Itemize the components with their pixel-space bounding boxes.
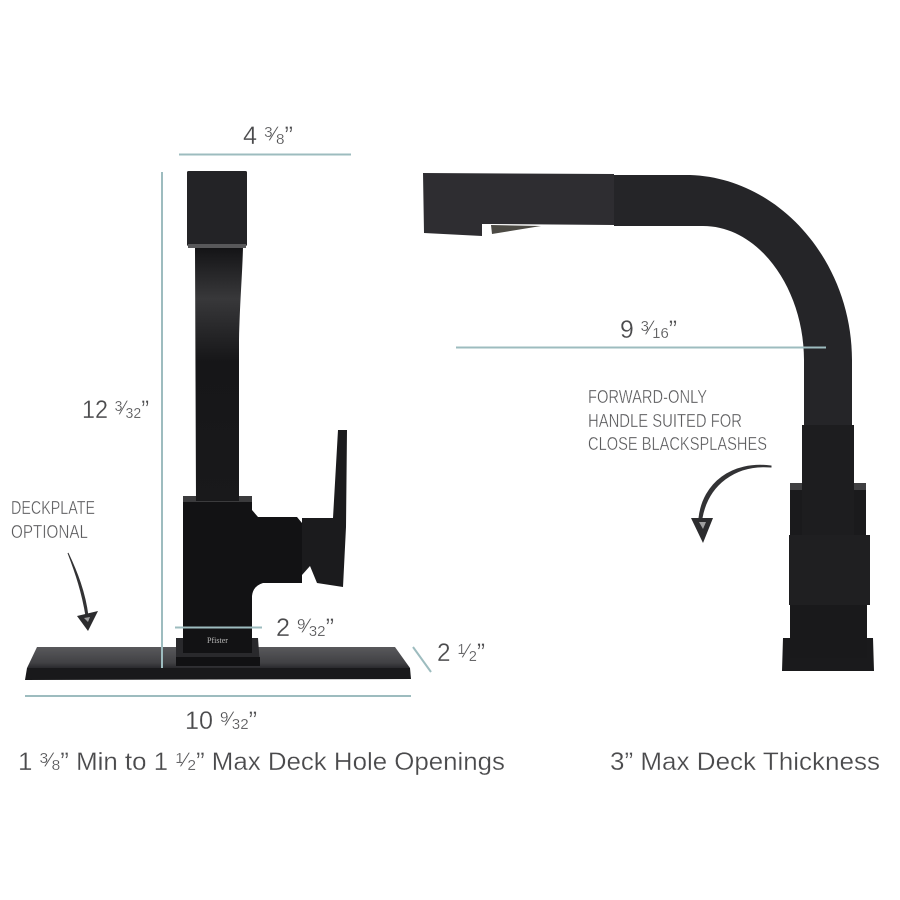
- faucet: front view: [423, 173, 874, 671]
- caption: deck hole openings: 3: [40, 750, 48, 767]
- dimension: spout width: ”: [285, 122, 293, 150]
- dimension: height: ⁄: [118, 398, 128, 420]
- handle: [302, 430, 347, 587]
- dimension: base width: 2: [276, 614, 290, 642]
- dimension: height: 12: [82, 396, 110, 424]
- handle tabs: [790, 483, 866, 535]
- dimension: reach: 16: [652, 325, 669, 342]
- base escutcheon: [176, 638, 260, 666]
- note: forward-only handle: CLOSE BLACKSPLASHES: [588, 433, 767, 454]
- note: deckplate optional: [11, 497, 95, 542]
- dimension: reach: 9: [620, 316, 634, 344]
- faucet body and handle connector: [183, 496, 302, 653]
- note: deckplate optional: OPTIONAL: [11, 521, 88, 542]
- dimension: reach: ⁄: [644, 318, 655, 340]
- caption: deck hole openings: ⁄: [179, 750, 190, 772]
- spray head lower tab: [491, 225, 541, 234]
- dimension: spout width: 8: [276, 131, 285, 148]
- dimension lines: [25, 154, 826, 696]
- arrow: to handle: [691, 465, 771, 543]
- dimension: height: 3: [115, 398, 122, 415]
- note: forward-only handle: [588, 386, 767, 454]
- dimension: reach: 3: [641, 318, 649, 335]
- caption: deck hole openings: ” Min to 1: [60, 748, 164, 776]
- pull-out spray head: [423, 173, 614, 236]
- dimension: deckplate depth: ”: [477, 639, 485, 667]
- dimension: deckplate width: ”: [249, 707, 257, 735]
- dimension: base width: ⁄: [300, 616, 311, 638]
- spray head: [187, 171, 247, 248]
- note: forward-only handle: HANDLE SUITED FOR: [588, 410, 742, 431]
- caption: deck hole openings: 8: [52, 757, 60, 774]
- dimension: deckplate width: 10: [185, 707, 213, 735]
- caption: deck hole openings: ⁄: [43, 750, 54, 772]
- caption: deck hole openings: 1: [175, 750, 184, 767]
- spout arc: [614, 175, 852, 426]
- dimension: spout width: 4: [243, 122, 257, 150]
- caption: deck hole openings: ” Max Deck Hole Openings: [196, 748, 495, 776]
- dimension: deckplate depth: ⁄: [461, 640, 471, 662]
- dimension: base width: ”: [326, 614, 334, 642]
- note: deckplate optional: DECKPLATE: [11, 497, 95, 518]
- body top plate: [183, 496, 252, 502]
- arrow: to deckplate: [68, 553, 98, 631]
- caption: deck thickness: 3” Max Deck Thickness: [610, 748, 880, 776]
- lower body: [790, 605, 867, 658]
- dimension: deckplate depth: 2: [469, 648, 477, 665]
- caption: deck hole openings: 1: [18, 748, 32, 776]
- handle column: [802, 425, 854, 535]
- dimension: spout width: 3: [264, 124, 273, 141]
- dimension: deckplate width: 9: [220, 709, 228, 726]
- dimension: deckplate depth: 2: [437, 639, 451, 667]
- dimension: base width: 9: [297, 616, 305, 633]
- caption: deck hole openings: 2: [187, 757, 196, 774]
- dimension: reach: ”: [669, 316, 677, 344]
- faucet: side view with deckplate: [25, 171, 411, 680]
- dimension: height: 32: [126, 405, 141, 422]
- dimension: height: ”: [141, 396, 150, 424]
- dimension: deckplate width: 32: [232, 716, 249, 733]
- brand mark: Pfister: [207, 636, 228, 645]
- dimension: deckplate depth: 1: [457, 641, 465, 658]
- dimension: deckplate width: ⁄: [223, 708, 234, 730]
- base: [782, 638, 874, 671]
- dimension: spout width: ⁄: [268, 124, 279, 146]
- body block: [789, 535, 870, 605]
- spout stem: [195, 248, 243, 501]
- note: forward-only handle: FORWARD-ONLY: [588, 386, 707, 407]
- deckplate: [25, 647, 411, 680]
- dimension: base width: 32: [309, 623, 326, 640]
